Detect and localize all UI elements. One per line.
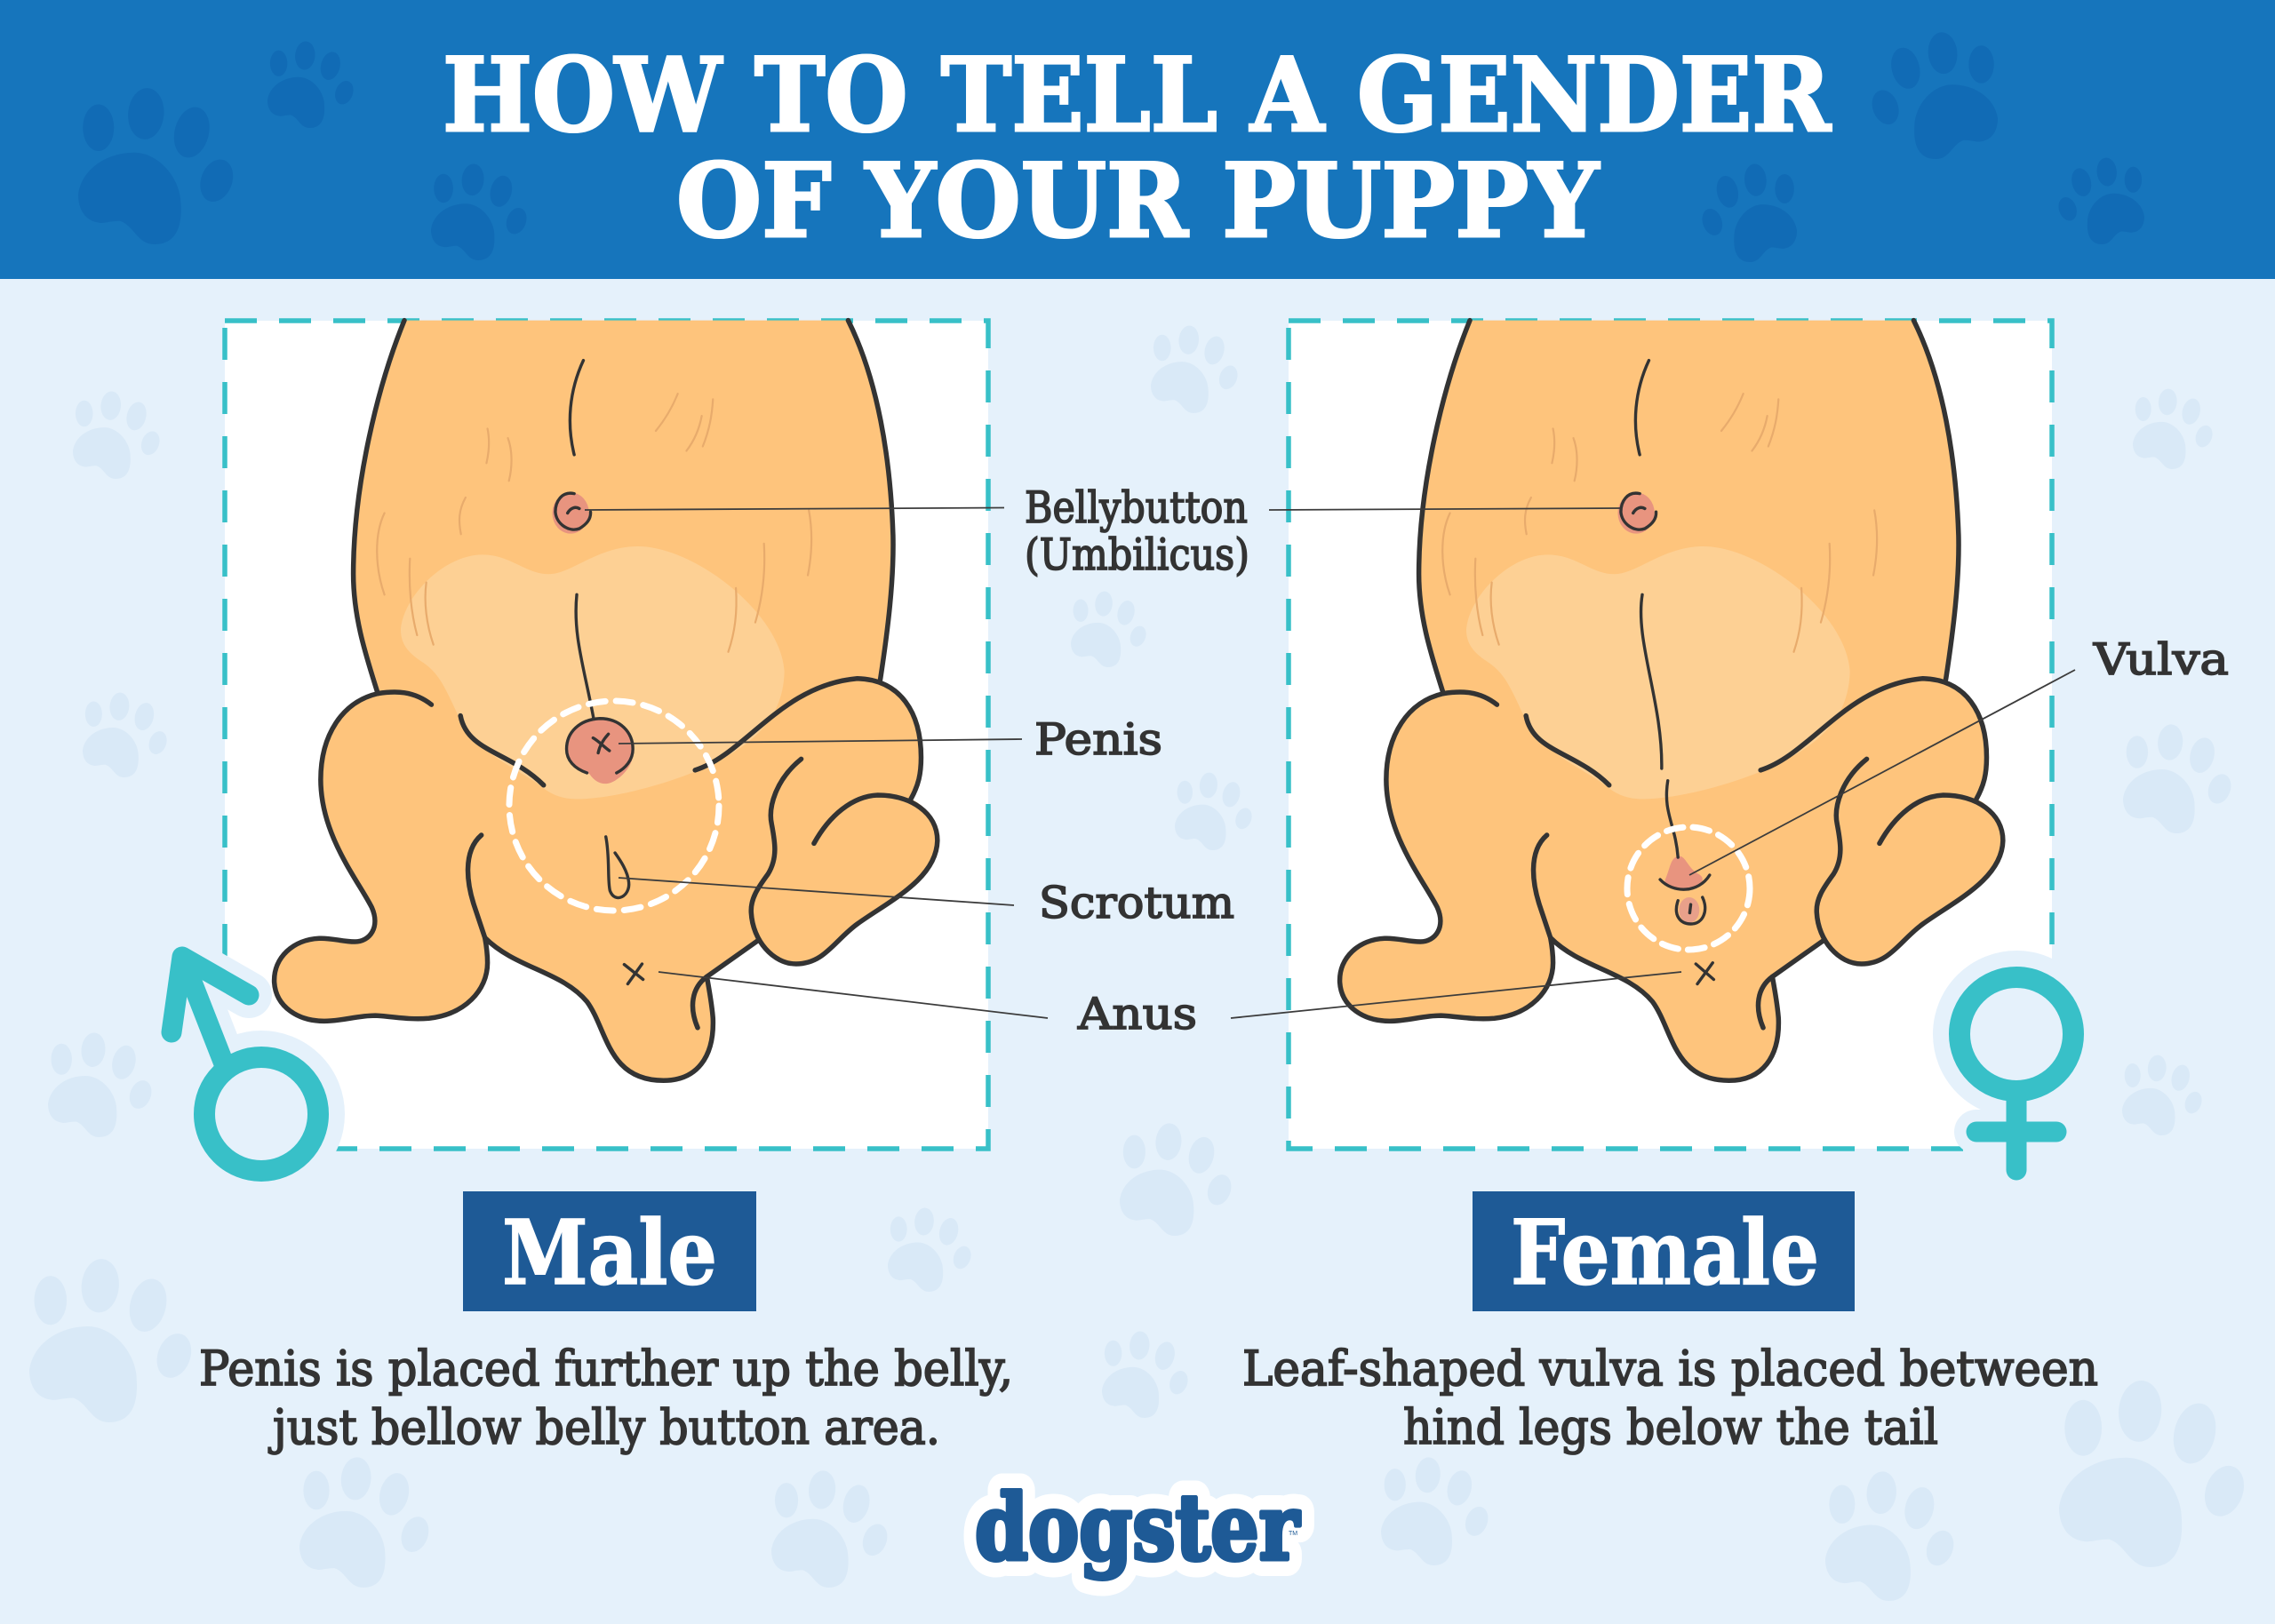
callout labels: Vulva [2093, 634, 2229, 685]
anus mark [1696, 963, 1713, 984]
panel: male diagram [225, 321, 988, 1149]
callout labels: Scrotum [1039, 878, 1234, 928]
text block: female description [1242, 1341, 2098, 1455]
title: OF YOUR PUPPY [676, 141, 1600, 260]
logo: dogster: dogster [975, 1475, 1300, 1581]
callout labels: Penis [1034, 714, 1162, 765]
anus mark [624, 964, 643, 984]
scrotum [606, 837, 629, 898]
leader lines [585, 508, 2075, 1018]
title [443, 36, 1832, 260]
vulva [1641, 594, 1710, 924]
header banner [0, 0, 2275, 279]
background paw pattern [29, 325, 2251, 1601]
panel: female diagram [1289, 321, 2052, 1149]
heading badge: female: Female [1511, 1200, 1819, 1305]
callout labels [1025, 482, 2229, 1039]
callout labels: Anus [1077, 989, 1197, 1039]
icon: male symbol [172, 957, 320, 1173]
title: HOW TO TELL A GENDER [443, 36, 1832, 155]
dashed highlight circle, female [1627, 827, 1750, 950]
text block: female description: Leaf-shaped vulva is placed between [1242, 1341, 2098, 1397]
logo: dogster: TM [1289, 1531, 1297, 1537]
callout labels: Bellybutton [1025, 482, 1248, 533]
logo: dogster: dogster [975, 1475, 1300, 1581]
heading badge: male: Male [502, 1200, 717, 1305]
callout labels: (Umbilicus) [1025, 529, 1249, 580]
penis [567, 594, 634, 784]
puppy belly illustration, male [275, 321, 938, 1080]
text block: female description: hind legs below the tail [1403, 1399, 1938, 1455]
text block: male description: Penis is placed further up the belly, [199, 1341, 1013, 1397]
text block: male description: just bellow belly button area. [267, 1399, 940, 1455]
icon: female symbol [1958, 975, 2075, 1170]
text block: male description [199, 1341, 1013, 1455]
puppy belly illustration, female [1340, 321, 2003, 1080]
dashed highlight circle, male [509, 701, 719, 911]
